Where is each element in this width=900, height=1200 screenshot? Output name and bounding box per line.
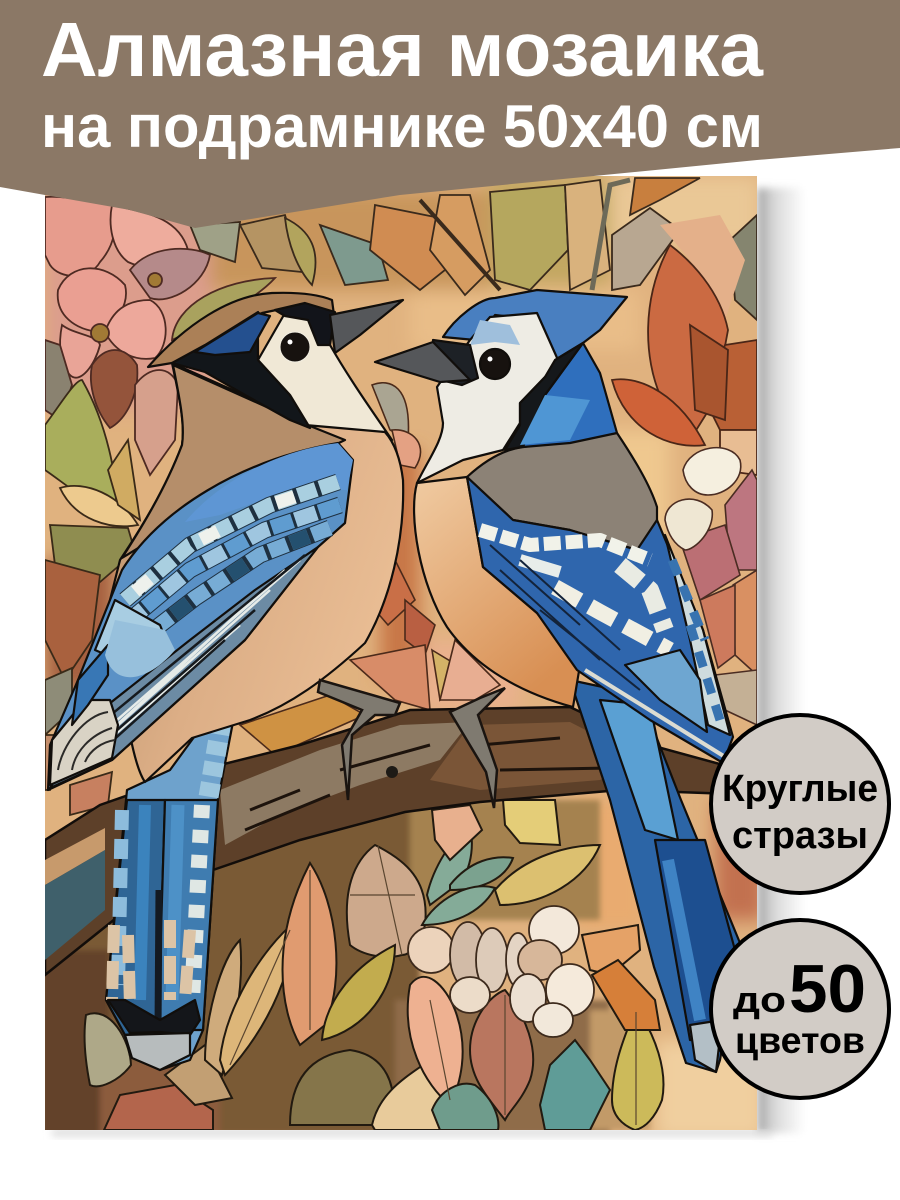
right bird feet	[450, 688, 505, 808]
right autumn leaves	[612, 245, 757, 475]
branch	[45, 707, 760, 975]
badge: round rhinestones	[711, 715, 889, 893]
left bird wing	[48, 443, 353, 790]
left bird eye	[280, 332, 310, 362]
left bird	[48, 293, 403, 1070]
left bird back shading	[122, 365, 345, 558]
right bird head and neck	[417, 290, 627, 483]
left bird body	[100, 363, 403, 782]
left bird head	[148, 293, 392, 440]
cream blossom cluster	[408, 906, 594, 1037]
badge: up to 50 colours: цветов	[735, 1020, 865, 1061]
right pink flower and white blossoms	[665, 448, 757, 725]
badge: up to 50 colours: до	[733, 979, 786, 1020]
left bird beak	[330, 300, 403, 353]
right bird grey back	[467, 433, 657, 553]
header band	[0, 0, 900, 228]
painting background washes	[40, 176, 765, 1140]
right bird wing	[467, 477, 733, 763]
right bird	[375, 290, 740, 1072]
right bird body	[414, 477, 580, 707]
top-left pink flowers	[45, 197, 275, 475]
title: Алмазная мозаика	[41, 7, 764, 93]
left bird tail	[104, 726, 234, 1072]
subtitle: на подрамнике 50х40 см	[41, 93, 763, 160]
badge: round rhinestones: стразы	[732, 815, 868, 857]
painting: blue jays on a branch	[40, 176, 765, 1140]
right bird beak	[375, 342, 470, 382]
canvas shadow	[52, 188, 805, 1139]
left-side leaves	[45, 380, 140, 815]
lower background leaves	[85, 800, 663, 1130]
badge: up to 50 colours: 50	[789, 951, 866, 1027]
centre background between birds	[240, 383, 500, 755]
badge: up to 50 colours	[711, 920, 889, 1098]
right bird eye	[480, 349, 510, 379]
badge: round rhinestones: Круглые	[722, 768, 878, 810]
top branches and leaves	[190, 178, 757, 320]
left bird feet	[318, 680, 400, 800]
right bird tail	[570, 680, 740, 1072]
